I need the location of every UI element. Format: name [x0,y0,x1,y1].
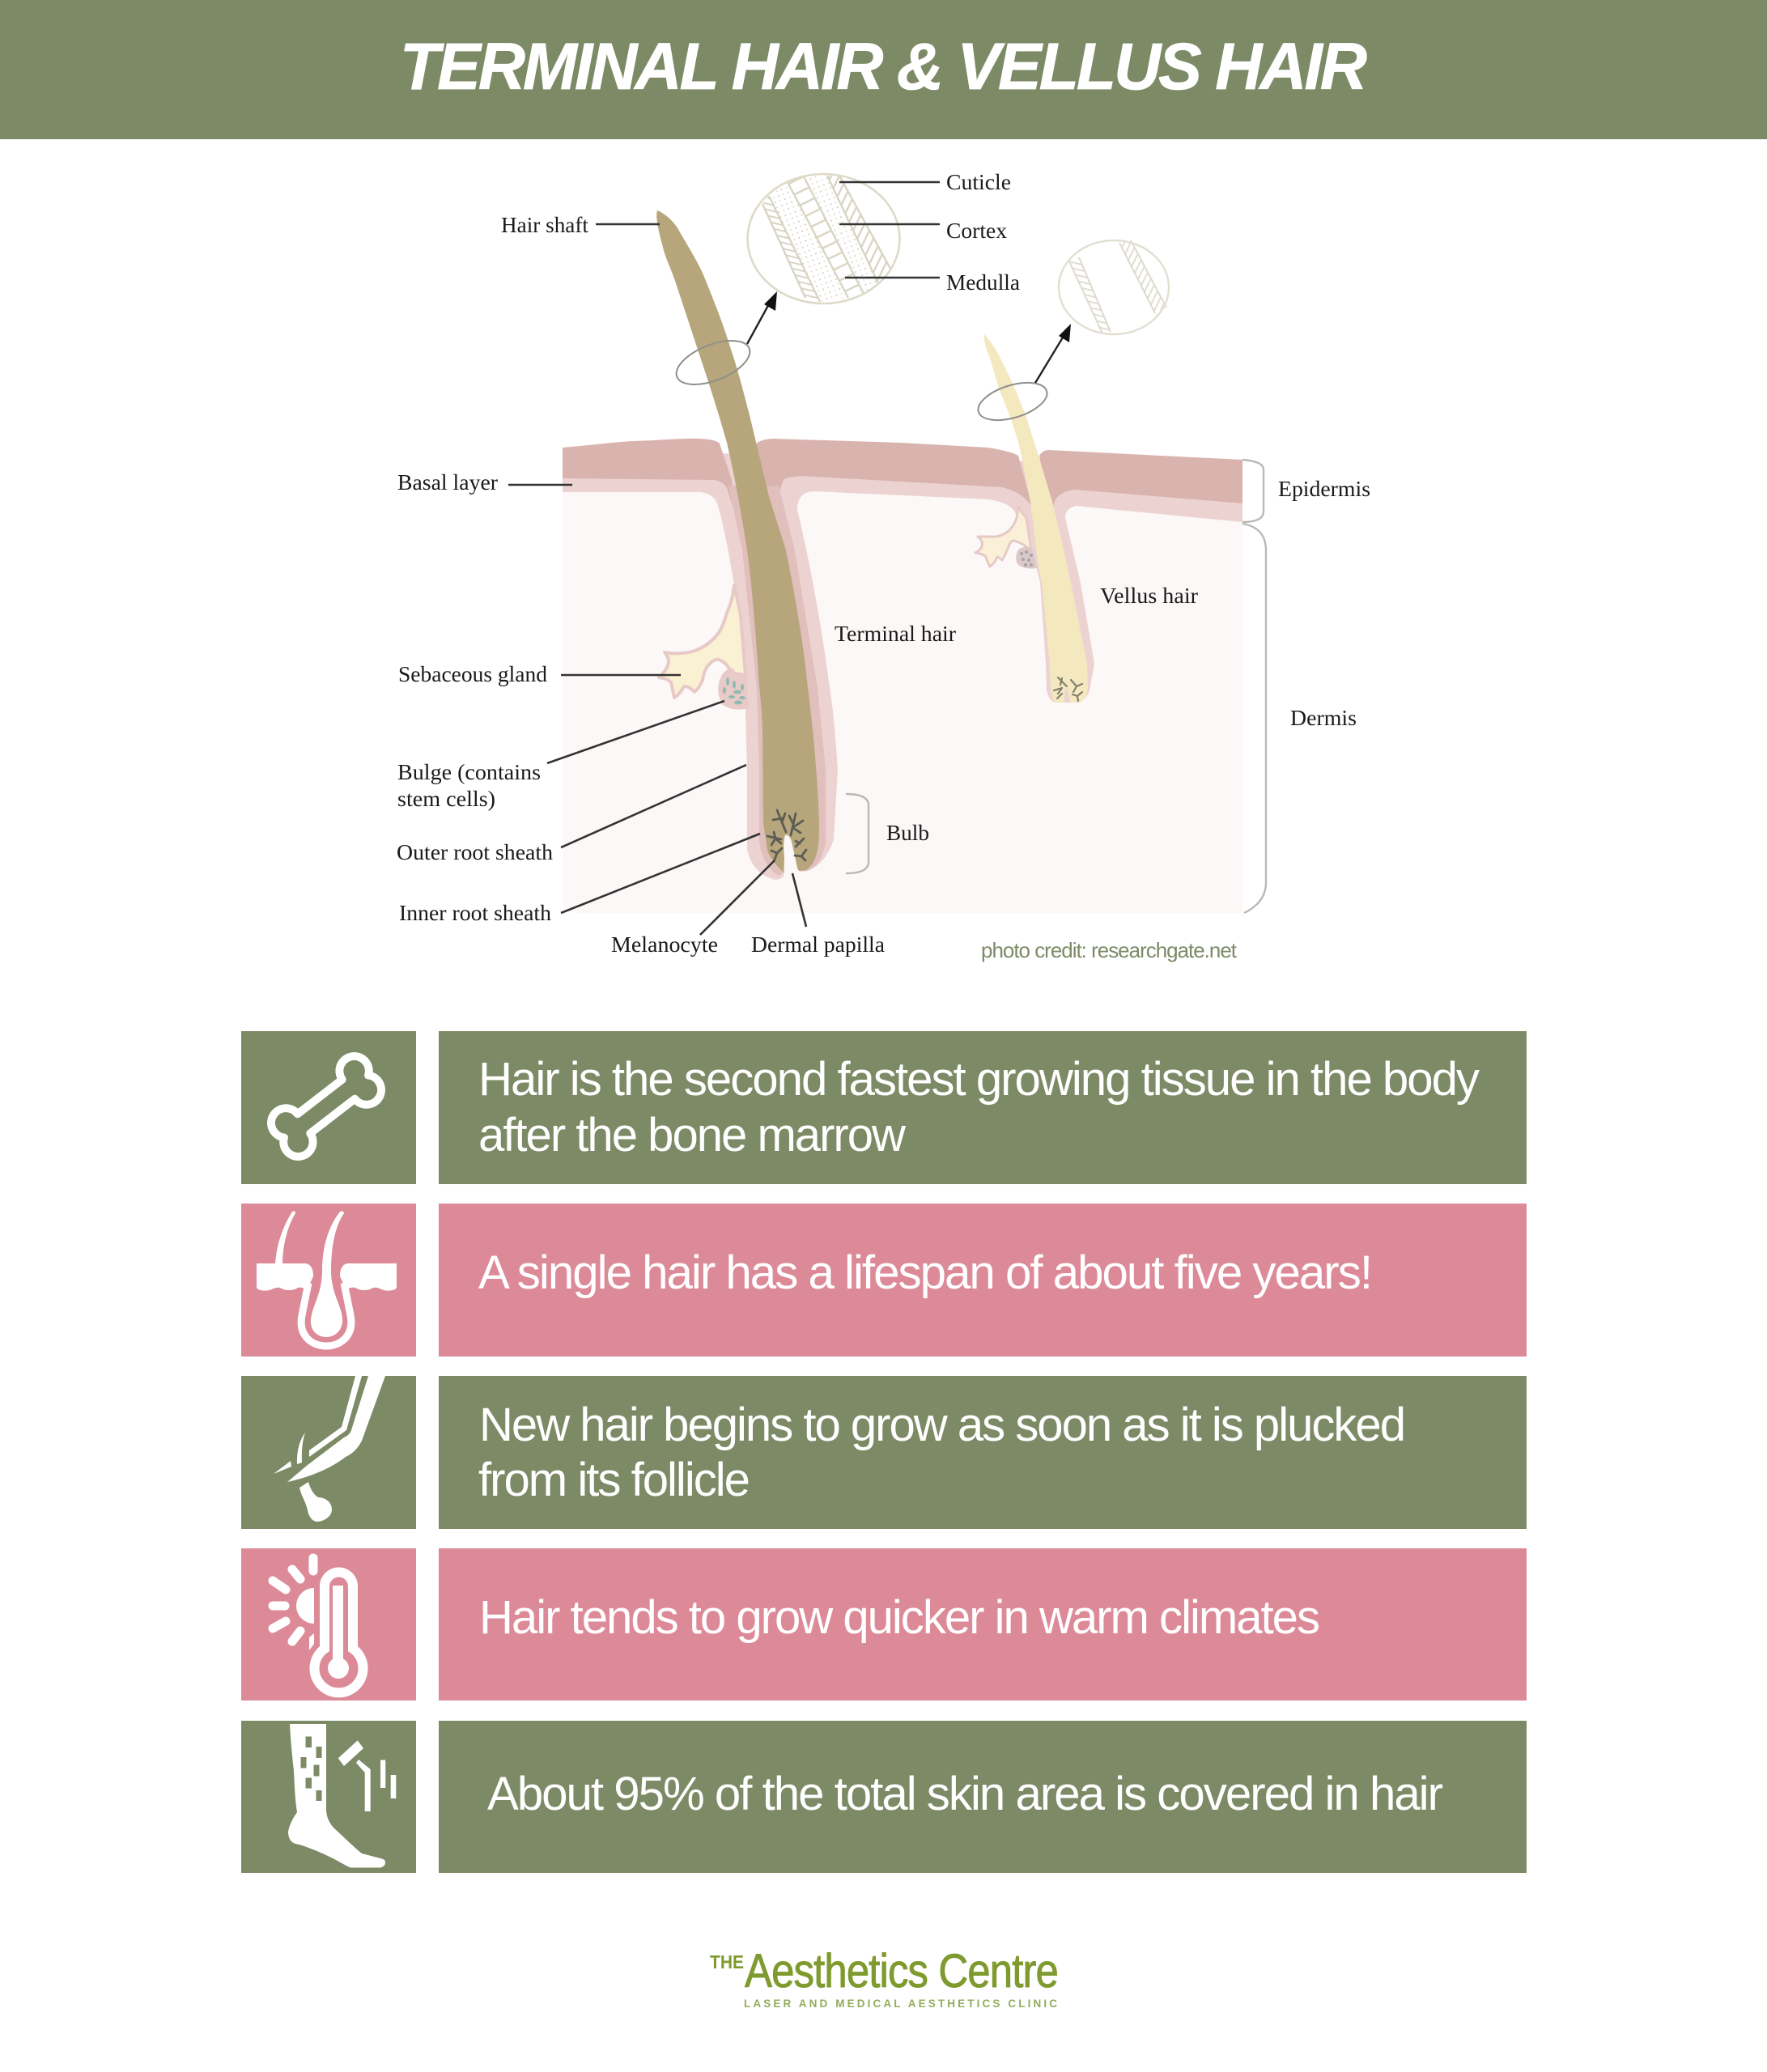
label: Basal layer: Basal layer [397,469,498,495]
row 2: lifespan fact [241,1204,1527,1357]
title: TERMINAL HAIR & VELLUS HAIR [400,30,1367,104]
label: Medulla: Medulla [946,270,1020,295]
label: Bulge: stem cells) [397,786,495,811]
footer logo: LASER AND MEDICAL AESTHETICS CLINIC [744,1998,1057,2010]
photo credit: photo credit: researchgate.net [981,938,1238,962]
vellus hair bulge [1016,547,1037,568]
terminal hair inner root sheath [728,486,826,876]
row 4: warm climate fact [241,1548,1527,1700]
label: Hair shaft: Hair shaft [501,212,588,237]
footer logo: THE [710,1951,744,1972]
magnified terminal hair cross-section [748,174,900,304]
terminal hair melanocytes [767,810,806,860]
fact text [439,1721,1527,1873]
fact text: About 95% of the total skin area is covered in hair [487,1768,1443,1820]
magnified vellus hair cross-section [1059,240,1169,334]
epidermis left section [563,439,737,518]
fact text: Hair is the second fastest growing tissue in the body [478,1053,1480,1106]
label: Vellus hair: Vellus hair [1100,583,1198,608]
fact text [439,1204,1527,1357]
dermal papilla slit [784,835,805,882]
terminal hair shaft [656,210,819,873]
vellus hair sebaceous gland [975,507,1031,567]
label: Outer root sheath: Outer root sheath [397,839,553,864]
fact text [439,1548,1527,1700]
arrow: vellus hair to magnified view [1035,324,1071,383]
fact text: Hair tends to grow quicker in warm climates [479,1591,1319,1644]
terminal hair sebaceous gland [659,585,745,698]
fact text: after the bone marrow [478,1109,907,1161]
terminal zoom ellipse [670,332,756,393]
header banner [0,0,1767,139]
arrow: terminal hair to magnified view [747,291,777,344]
fact text: A single hair has a lifespan of about five years! [478,1246,1371,1299]
label: Bulge [397,759,541,811]
label: Cuticle: Cuticle [946,169,1011,194]
epidermis right section [1039,450,1242,518]
label: Inner root sheath: Inner root sheath [399,900,551,925]
vellus zoom ellipse [974,376,1051,427]
fact text: New hair begins to grow as soon as it is plucked [479,1399,1404,1451]
fact text [439,1031,1527,1184]
terminal hair bulge with stem cells [718,668,749,710]
label: Cortex: Cortex [946,218,1007,243]
label: Terminal hair: Terminal hair [835,621,956,646]
dermis background [563,478,1242,913]
fact text: from its follicle [478,1454,749,1506]
icon: sun and thermometer [241,1548,416,1700]
icon: leg with razor [241,1721,416,1873]
label: Dermis: Dermis [1290,705,1357,730]
basal layer and outer root sheaths [563,449,1242,880]
row 3: plucking fact [241,1376,1527,1529]
brackets: bulb, epidermis, dermis [846,460,1266,913]
label: Epidermis: Epidermis [1278,476,1370,501]
label: Bulb: Bulb [886,820,929,845]
row 5: skin coverage fact [241,1721,1527,1873]
label: Melanocyte: Melanocyte [611,932,718,957]
vellus hair melanocytes [1054,677,1082,701]
leader lines [508,182,940,935]
icon: bone [241,1031,416,1184]
row 1: bone marrow fact [241,1031,1527,1184]
hair anatomy diagram [397,169,1370,962]
footer logo: Aesthetics Centre [745,1945,1058,1998]
icon: tweezers and plucked hair [241,1376,416,1529]
footer logo [710,1945,1058,2010]
label: Bulge: Bulge (contains [397,759,541,784]
fact text [439,1376,1527,1529]
icon: hair follicle [241,1204,416,1357]
epidermis middle section [756,439,1032,506]
vellus hair shaft [984,334,1088,703]
label: Sebaceous gland: Sebaceous gland [398,661,547,686]
label: Dermal papilla: Dermal papilla [751,932,885,957]
